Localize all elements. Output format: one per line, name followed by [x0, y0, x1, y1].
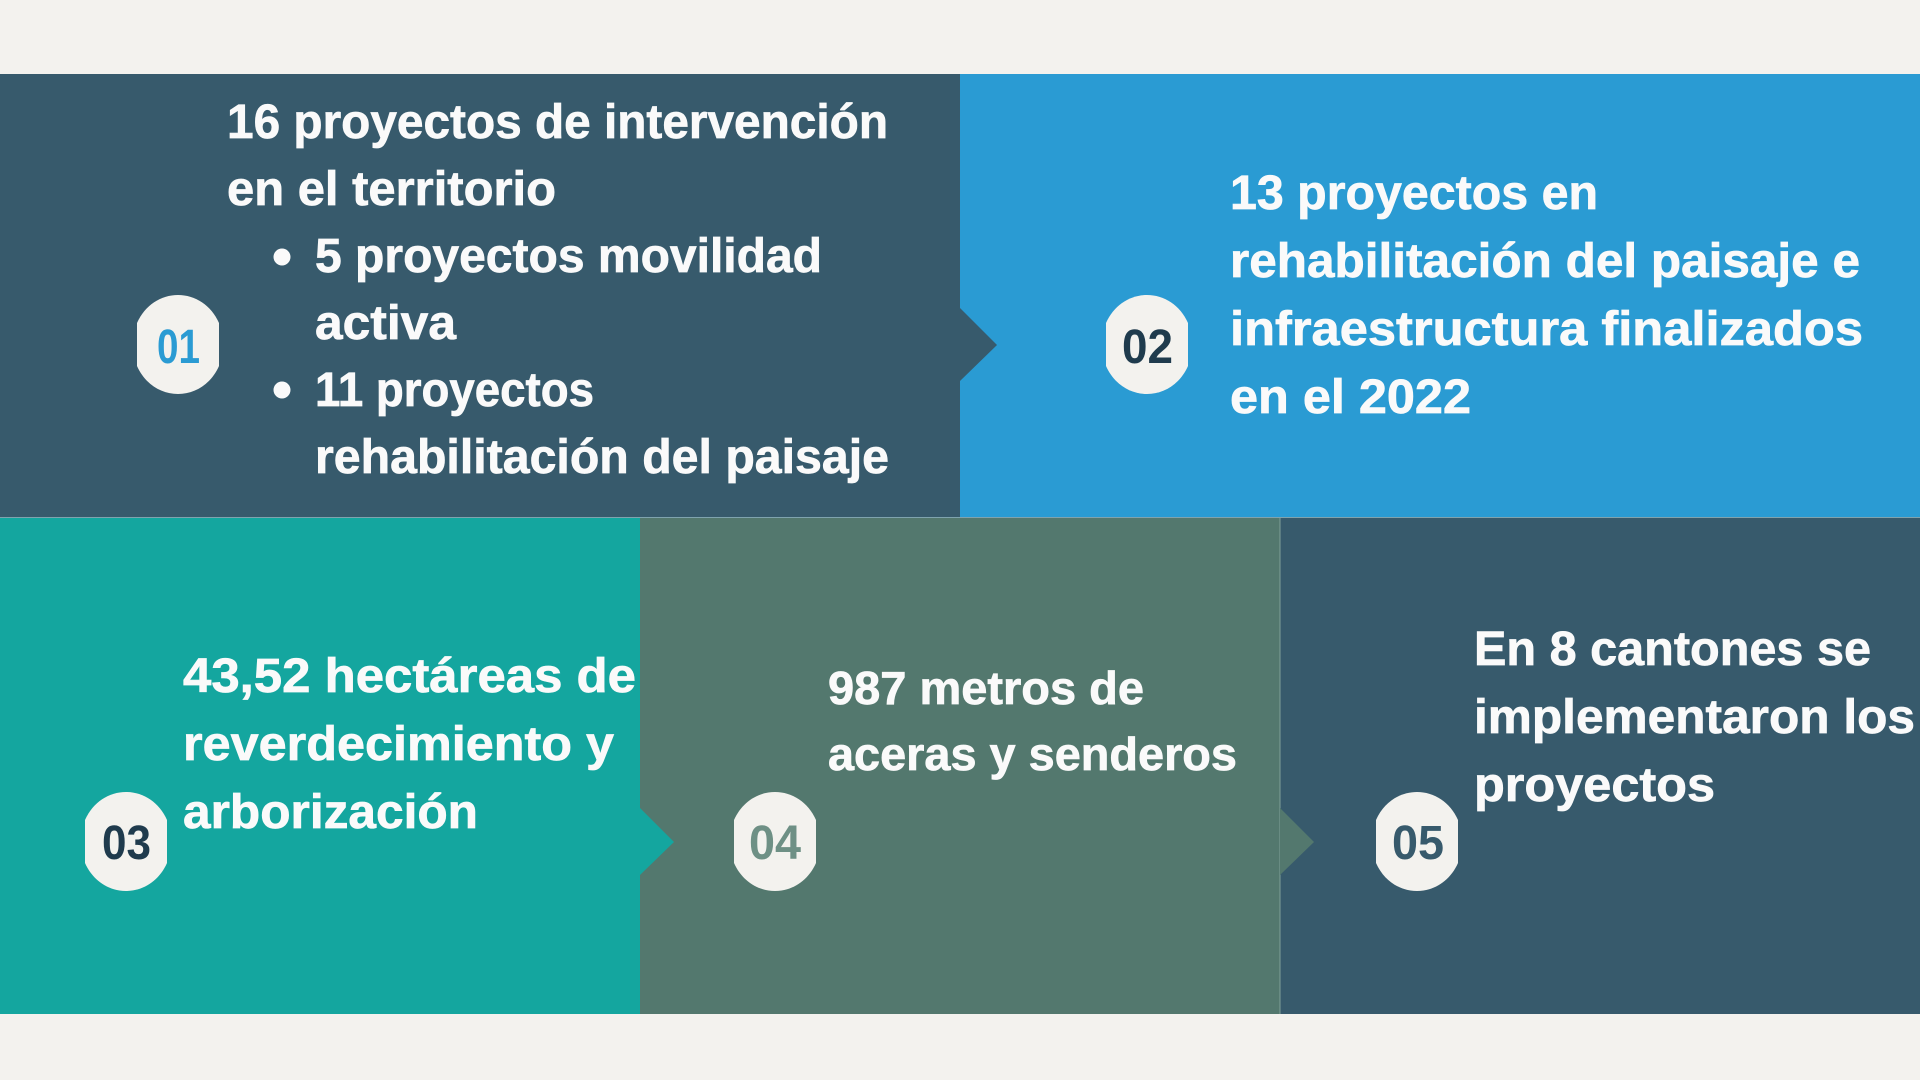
text: hectares: arborización	[183, 786, 478, 839]
text: 13 projects: infraestructura finalizados	[1230, 303, 1863, 356]
text: cantons: implementaron los	[1474, 691, 1915, 744]
text: cantons: En 8 cantones se	[1474, 623, 1871, 676]
bullet: landscape rehabilitation	[274, 364, 889, 484]
panel: 05 cantons	[1280, 518, 1920, 1014]
heading: 16 projects	[227, 96, 888, 216]
badge 03: 03	[102, 817, 151, 870]
panel: 02 landscape and infrastructure	[960, 74, 1920, 517]
arrow: panel 04 to 05	[1280, 808, 1314, 875]
text: cantons	[1474, 623, 1915, 812]
bullet: landscape rehabilitation: rehabilitación del paisaje	[315, 431, 889, 484]
text: metres	[828, 662, 1237, 780]
heading: 16 projects: en el territorio	[227, 163, 556, 216]
text: 13 projects: en el 2022	[1230, 371, 1471, 424]
badge 04: 04	[749, 817, 801, 870]
bullet: active mobility: 5 proyectos movilidad	[315, 230, 822, 283]
badge 03	[85, 792, 167, 891]
badge 05: 05	[1392, 817, 1444, 870]
text: 13 projects	[1230, 167, 1863, 424]
badge 01: 01	[157, 321, 200, 374]
text: 13 projects: rehabilitación del paisaje e	[1230, 235, 1860, 288]
badge 05	[1376, 792, 1458, 891]
text: cantons: proyectos	[1474, 759, 1715, 812]
text: metres: 987 metros de	[828, 662, 1144, 714]
heading: 16 projects: 16 proyectos de intervención	[227, 96, 888, 149]
arrow: panel 03 to 04	[640, 808, 674, 875]
panel: 03 greening	[0, 518, 640, 1014]
panel: 04 sidewalks	[640, 518, 1280, 1014]
bullet: active mobility	[274, 230, 822, 350]
bullet: landscape rehabilitation: 11 proyectos	[315, 364, 594, 417]
bullet: active mobility: activa	[315, 297, 456, 350]
text: hectares	[183, 650, 636, 839]
panel: 01 territory projects	[0, 74, 960, 517]
badge 01	[137, 295, 219, 394]
text: 13 projects: 13 proyectos en	[1230, 167, 1598, 220]
arrow: panel 01 to 02	[960, 308, 997, 381]
badge 02: 02	[1122, 321, 1173, 374]
text: hectares: 43,52 hectáreas de	[183, 650, 636, 703]
badge 02	[1106, 295, 1188, 394]
text: hectares: reverdecimiento y	[183, 718, 614, 771]
badge 04	[734, 792, 816, 891]
text: metres: aceras y senderos	[828, 728, 1237, 780]
